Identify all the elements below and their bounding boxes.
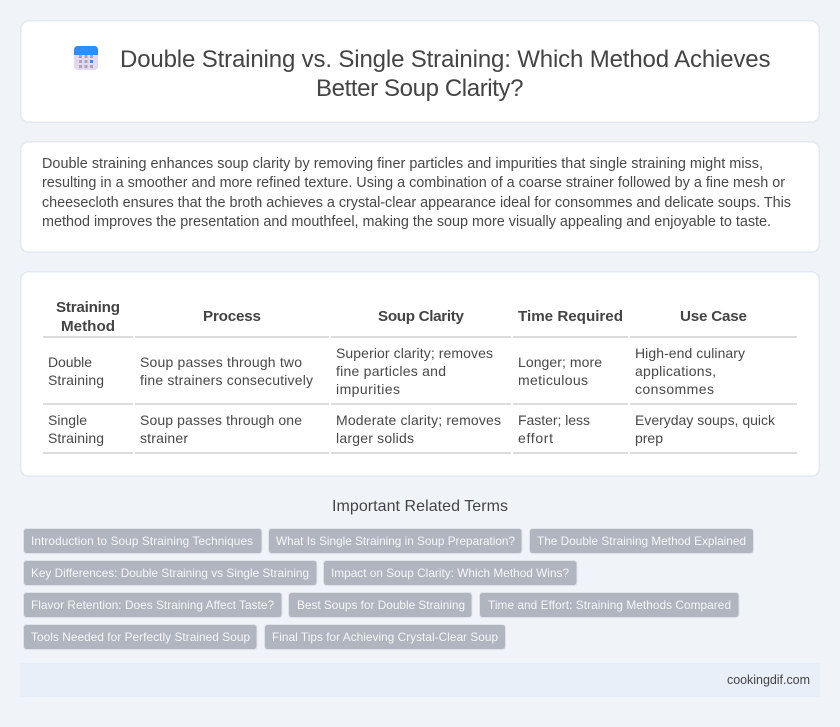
- table row: double straining: Superior clarity; removes: [336, 345, 493, 361]
- table row: double straining: meticulous: [518, 372, 588, 388]
- table row: double straining: Longer; more: [518, 354, 602, 370]
- table header: Method: [61, 318, 115, 335]
- related term tags: Tools Needed for Perfectly Strained Soup: [31, 630, 250, 644]
- table row: double straining: Soup passes through two: [140, 354, 302, 370]
- table row: single straining: Everyday soups, quick: [635, 412, 776, 428]
- table row: double straining: fine particles and: [336, 363, 446, 379]
- related term tags: [24, 528, 754, 650]
- title: Better Soup Clarity?: [316, 75, 524, 102]
- table header: Process: [203, 308, 261, 325]
- intro paragraph: [42, 156, 791, 230]
- table row: double straining: consommes: [635, 381, 714, 397]
- table header: Soup Clarity: [378, 308, 465, 325]
- icon: calendar: [74, 46, 98, 70]
- related term tags: Best Soups for Double Straining: [297, 598, 465, 612]
- panel: header: [21, 21, 819, 122]
- heading: related terms: Important Related Terms: [332, 498, 508, 515]
- table row: double straining: High-end culinary: [635, 345, 745, 361]
- table row: double straining: Double: [48, 354, 92, 370]
- related term tags: Flavor Retention: Does Straining Affect Taste?: [31, 598, 274, 612]
- related term tags: Introduction to Soup Straining Techniques: [31, 534, 253, 548]
- table row: single straining: prep: [635, 430, 663, 446]
- intro paragraph: Double straining enhances soup clarity by removing finer particles and impurities that single straining might miss,: [42, 156, 763, 172]
- table row: single straining: strainer: [140, 430, 188, 446]
- table row: double straining: impurities: [336, 381, 400, 397]
- table row: single straining: Straining: [48, 430, 104, 446]
- table row: single straining: effort: [518, 430, 553, 446]
- table header: Straining: [56, 299, 120, 316]
- table row: single straining: [48, 412, 776, 446]
- intro paragraph: resulting in a smoother and more refined texture. Using a combination of a coarse strainer followed by a fine mesh or: [42, 175, 785, 191]
- intro paragraph: cheesecloth ensures that the broth achieves a crystal-clear appearance ideal for consommes and delicate soups. This: [42, 195, 791, 211]
- table header: [56, 299, 747, 335]
- table row: single straining: Faster; less: [518, 412, 590, 428]
- table row: single straining: larger solids: [336, 430, 414, 446]
- related term tags: Key Differences: Double Straining vs Single Straining: [31, 566, 309, 580]
- panel: intro text: [21, 142, 819, 252]
- related term tags: The Double Straining Method Explained: [537, 534, 746, 548]
- footer: [20, 663, 820, 697]
- intro paragraph: method improves the presentation and mouthfeel, making the soup more visually appealing and enjoyable to taste.: [42, 214, 771, 230]
- table row: double straining: Straining: [48, 372, 104, 388]
- title: [120, 46, 770, 102]
- related term tags: What Is Single Straining in Soup Preparation?: [276, 534, 515, 548]
- related term tags: Impact on Soup Clarity: Which Method Wins?: [331, 566, 569, 580]
- table row: single straining: Single: [48, 412, 87, 428]
- table header: Time Required: [518, 308, 623, 325]
- footer: cookingdif.com: [727, 673, 810, 687]
- table row: double straining: fine strainers consecutively: [140, 372, 313, 388]
- panel: comparison table: [21, 272, 819, 476]
- table header: Use Case: [680, 308, 747, 325]
- table row: double straining: applications,: [635, 363, 716, 379]
- related term tags: Final Tips for Achieving Crystal-Clear Soup: [272, 630, 498, 644]
- table row: double straining: [48, 345, 745, 397]
- table row: single straining: Soup passes through one: [140, 412, 302, 428]
- table row: single straining: Moderate clarity; removes: [336, 412, 501, 428]
- title: Double Straining vs. Single Straining: Which Method Achieves: [120, 46, 770, 73]
- related term tags: Time and Effort: Straining Methods Compared: [488, 598, 731, 612]
